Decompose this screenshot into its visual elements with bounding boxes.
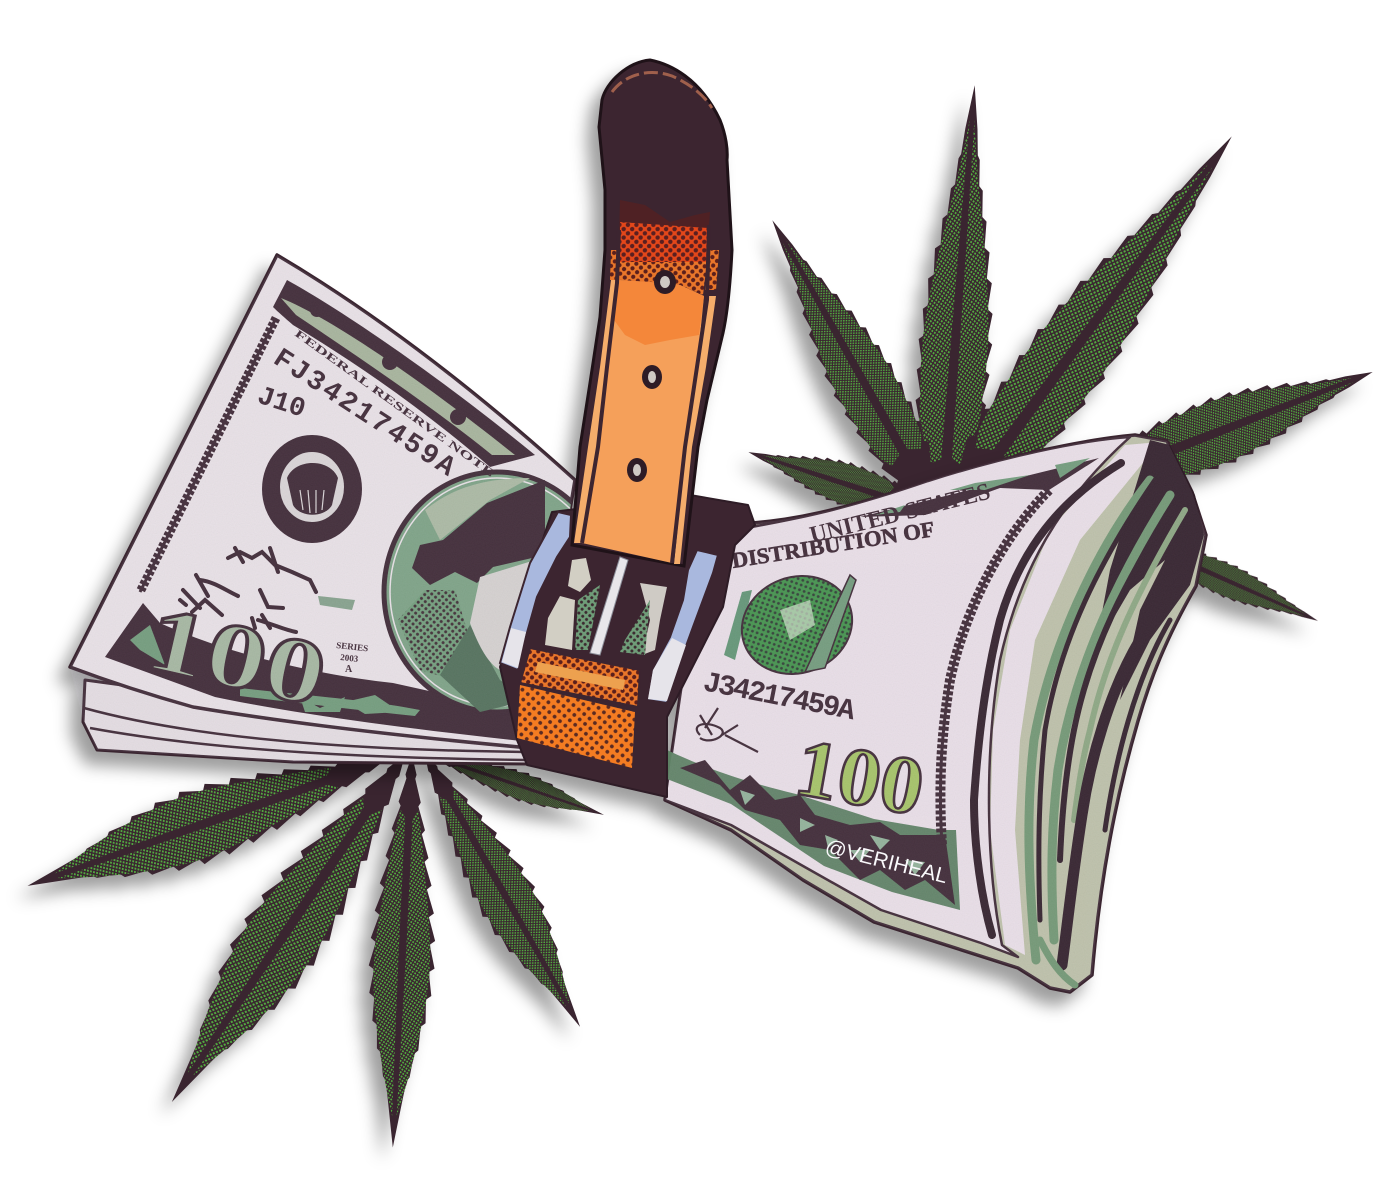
strap holes xyxy=(627,270,676,482)
belt keeper halftone panel xyxy=(517,685,635,768)
right top band green accents xyxy=(875,458,1090,515)
portrait hair xyxy=(412,480,545,585)
strap light side strips xyxy=(574,280,716,564)
money roll, belt and buckle group xyxy=(60,60,1220,1000)
buckle right gap view xyxy=(640,583,667,655)
strap stitch lines xyxy=(582,225,709,563)
veriheal watermark: @VERIHEAL xyxy=(823,836,950,888)
right stack page stripes xyxy=(1029,480,1185,985)
belt strap xyxy=(572,60,732,566)
portrait halftone cheek xyxy=(398,590,470,680)
belt loop roller xyxy=(520,648,640,707)
strap top rim highlight xyxy=(612,73,712,108)
right stack dark upper wedge xyxy=(1095,440,1204,700)
right border dark mottling xyxy=(680,760,955,905)
right stack pink page block xyxy=(990,442,1160,955)
buckle xyxy=(500,512,718,768)
cannabis leaf: bottom left cluster xyxy=(15,724,609,1149)
belt band and buckle frame xyxy=(500,495,755,797)
left bill denomination 100: 100 xyxy=(138,586,336,726)
right serrated border xyxy=(940,490,1049,845)
right sheet lower border band xyxy=(667,750,960,910)
buckle right silver arm xyxy=(647,550,718,703)
strap halftone transition xyxy=(620,222,707,262)
right bill mirrored legend: DISTRIBUTION OF xyxy=(730,516,936,573)
left serrated border xyxy=(140,318,276,592)
lower border green engraving xyxy=(130,625,420,716)
top border band xyxy=(273,280,535,467)
buckle halftone shadow xyxy=(575,585,650,655)
left bill stack edges xyxy=(83,680,530,764)
left bill signatures xyxy=(180,548,316,632)
portrait engraved collar xyxy=(440,625,508,712)
strap orange face xyxy=(582,280,704,563)
strap dark red transition xyxy=(619,200,710,230)
strap halftone side strips xyxy=(610,250,719,290)
portrait oval xyxy=(382,470,572,710)
left bill series mark: SERIES xyxy=(336,640,369,653)
paper grain overlay xyxy=(60,250,1220,1000)
buckle left silver arm xyxy=(500,512,571,670)
federal reserve seal xyxy=(262,435,362,543)
buckle left arm highlight xyxy=(502,628,526,668)
right border light flecks xyxy=(740,790,925,875)
right bill signature xyxy=(697,708,758,752)
left bill serial number: FJ34217459A xyxy=(267,344,460,484)
left bill front sheet xyxy=(70,255,575,748)
right stack body xyxy=(665,435,1206,992)
left bill plate code: J10 xyxy=(253,382,309,426)
right green 100 emblem xyxy=(724,561,866,689)
strap darker orange blob xyxy=(614,280,704,345)
right bill roll xyxy=(665,435,1206,992)
buckle left gap view xyxy=(545,558,591,650)
right front sheet xyxy=(665,437,1130,957)
left bill border lettering: FEDERAL RESERVE NOTE xyxy=(292,328,496,480)
right sheet dark fold stripe xyxy=(974,463,1121,935)
strap orange halftone fringe xyxy=(618,262,707,295)
left bill series year: 2003 xyxy=(340,652,359,664)
lower border band xyxy=(105,603,530,742)
right bill serial number: J34217459A xyxy=(700,666,858,728)
cannabis leaf: top right cluster xyxy=(741,82,1385,637)
buckle right arm highlight xyxy=(648,638,686,701)
left bill fan xyxy=(70,255,610,764)
buckle centre bar xyxy=(590,557,628,655)
portrait face highlight xyxy=(470,562,530,670)
right bill green 100: 100 xyxy=(789,721,931,833)
right bill upper legend: UNITED STATES xyxy=(807,479,993,549)
right top border band xyxy=(860,458,1099,517)
top border green field xyxy=(281,298,515,455)
roller highlight xyxy=(535,662,625,690)
left bill green signature smear xyxy=(318,596,355,610)
top border ovals xyxy=(310,303,466,425)
left bill series letter: A xyxy=(345,664,353,675)
portrait light green forehead xyxy=(425,478,530,540)
left bill engraved design xyxy=(105,280,610,742)
